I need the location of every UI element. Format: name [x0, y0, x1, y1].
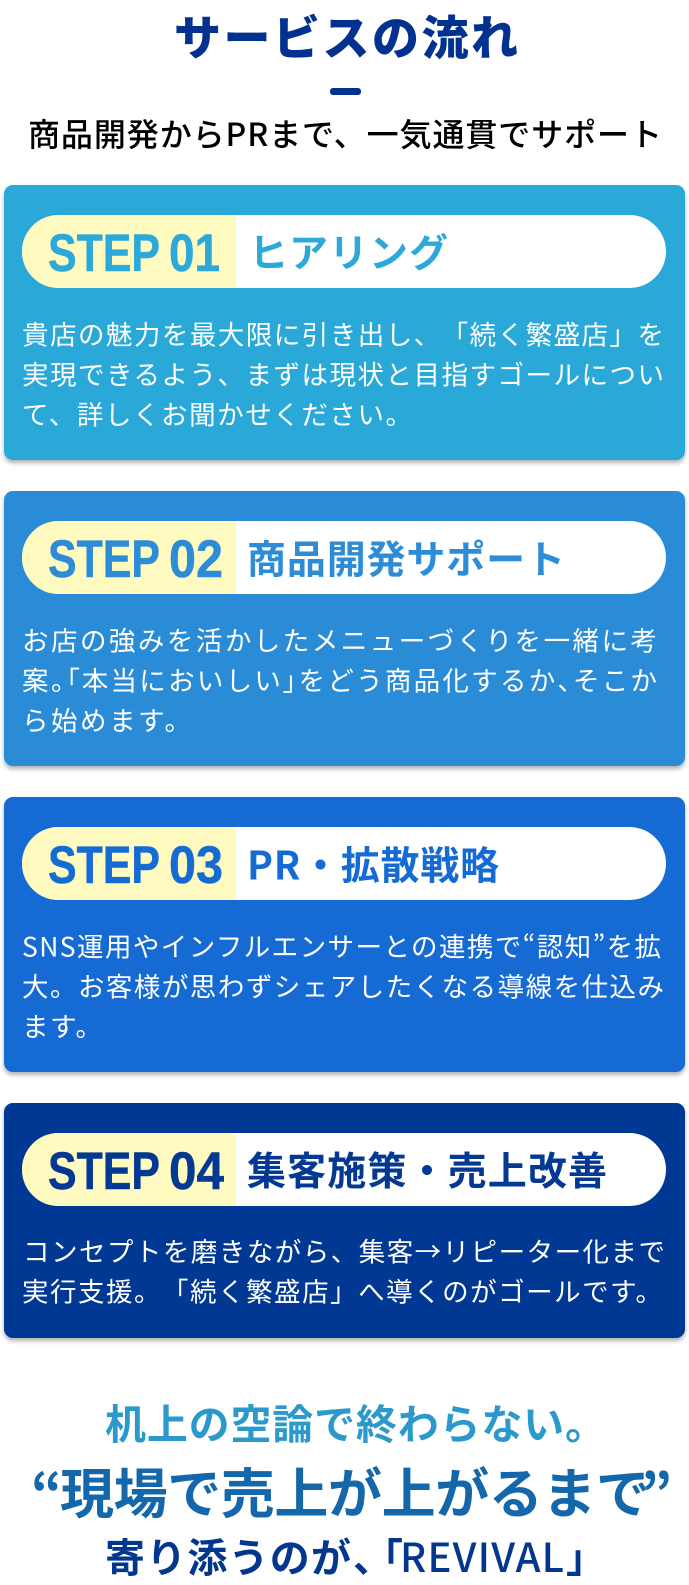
step 03 body: 大。お客様が思わずシェアしたくなる導線を仕込み [22, 966, 664, 1004]
step 04 number: 04 [169, 1142, 224, 1201]
step 01 body [22, 314, 664, 432]
panel: step 02 [4, 491, 685, 766]
step 04 body: 実行支援。「続く繁盛店」へ導くのがゴールです。 [22, 1270, 662, 1310]
title accent dash [330, 88, 361, 95]
closing line 3 [105, 1526, 606, 1584]
step 03 label: STEP [48, 836, 160, 895]
step 01 number: 01 [169, 224, 220, 283]
step 02 body [22, 620, 657, 738]
step 04 pill [22, 1133, 666, 1206]
step 03 body: ます。 [22, 1006, 102, 1044]
step 01 label: STEP [48, 224, 160, 283]
closing line 3 opening bracket: 「 [363, 1526, 403, 1584]
step 02 label: STEP [48, 530, 160, 589]
step 04 heading: 集客施策・売上改善 [247, 1141, 607, 1197]
step 02 pill [22, 521, 666, 594]
step 02 body: 案。「本当においしい」をどう商品化するか、そこか [22, 660, 657, 698]
subtitle: 商品開発からPRまで、一気通貫でサポート [28, 110, 662, 156]
step 04 body [22, 1230, 665, 1310]
panel: step 01 [4, 185, 685, 460]
step 04 label: STEP [48, 1142, 160, 1201]
brand name: REVIVAL [400, 1526, 564, 1584]
closing line 1: 机上の空論で終わらない。 [105, 1391, 606, 1451]
closing line 3 comma: 、 [353, 1526, 393, 1584]
step 02 heading: 商品開発サポート [247, 530, 565, 586]
step 02 body: お店の強みを活かしたメニューづくりを一緒に考 [22, 620, 657, 658]
step 04 body: コンセプトを磨きながら、集客→リピーター化まで [23, 1230, 665, 1270]
closing bracket: 」 [566, 1526, 606, 1584]
step 03 body: SNS運用やインフルエンサーとの連携で“認知”を拡 [22, 926, 661, 964]
step 01 body: て、詳しくお聞かせください。 [22, 394, 412, 432]
step 02 body: ら始めます。 [22, 700, 191, 738]
step 03 number: 03 [169, 836, 223, 895]
step 01 heading: ヒアリング [249, 223, 448, 279]
step 03 pill [22, 827, 666, 900]
closing message [31, 1391, 672, 1584]
closing quote: ” [641, 1450, 672, 1529]
closing line 2 [31, 1450, 672, 1529]
step 01 body: 実現できるよう、まずは現状と目指すゴールについ [22, 354, 664, 392]
step 01 pill [22, 215, 666, 288]
panel: step 03 [4, 797, 685, 1072]
panel: step 04 [4, 1103, 685, 1338]
opening quote: “ [31, 1450, 62, 1529]
closing line 3 lead: 寄り添うのが [105, 1526, 351, 1584]
step 01 body: 貴店の魅力を最大限に引き出し、「続く繁盛店」を [22, 314, 664, 352]
step 02 number: 02 [169, 530, 223, 589]
step 03 heading: PR・拡散戦略 [247, 836, 499, 892]
step 03 body [22, 926, 664, 1044]
main phrase: 現場で売上が上がるまで [60, 1450, 650, 1529]
title: サービスの流れ [174, 0, 518, 69]
